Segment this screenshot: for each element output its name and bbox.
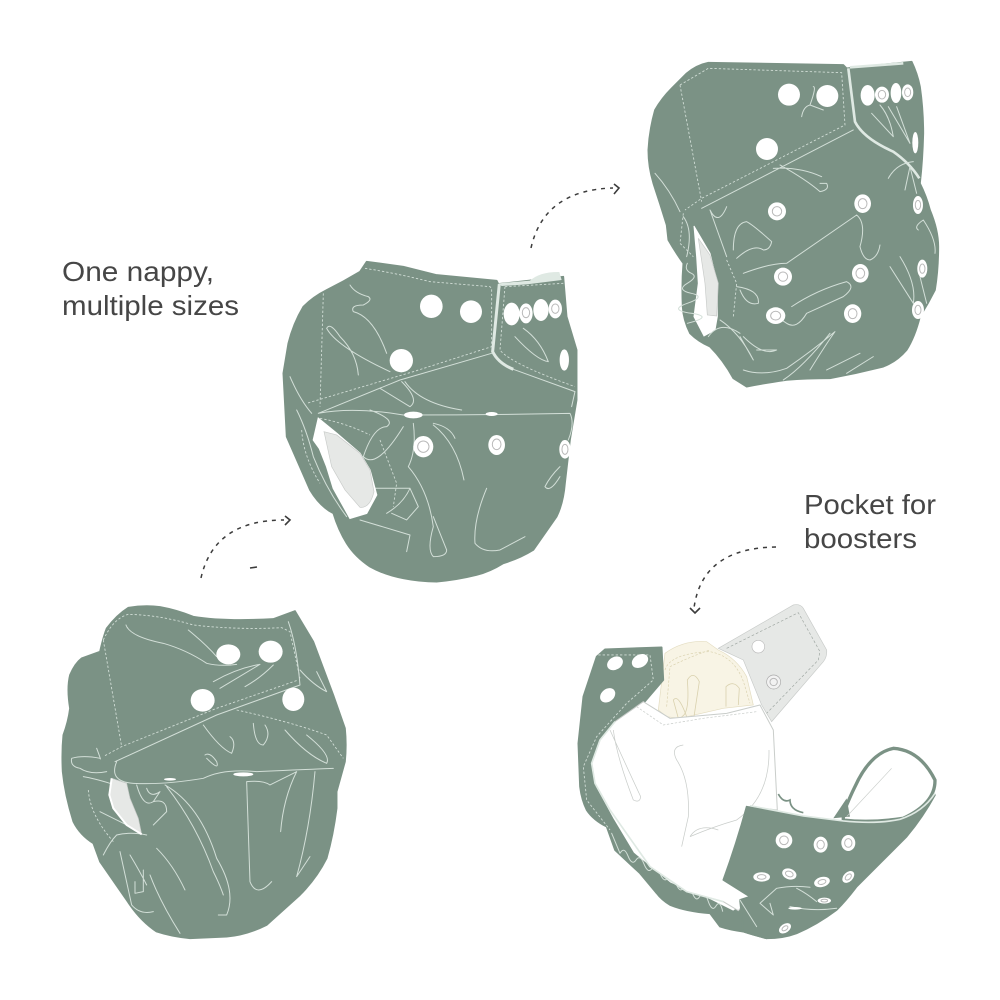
stitching and ruching on green band <box>583 655 757 925</box>
heading: multiple sizes line: multiple sizes <box>62 290 239 321</box>
heading: pocket for boosters: Pocket for <box>804 489 936 520</box>
fold stitching and creases <box>71 614 343 933</box>
arrow: pocket label to pocket <box>690 547 776 613</box>
snap holes <box>164 641 304 781</box>
heading: boosters line: boosters <box>804 523 917 554</box>
gusset lining <box>698 238 718 316</box>
arrow: medium to large nappy <box>531 184 619 248</box>
elastic gusset <box>694 226 717 336</box>
white leg edge <box>109 778 142 834</box>
fold stitching and creases <box>290 268 575 557</box>
nappy body <box>62 606 346 938</box>
pale lining edge <box>592 722 723 902</box>
snap holes <box>390 295 569 418</box>
press studs <box>413 300 571 459</box>
front panel edge highlight <box>750 793 935 822</box>
waist lining highlight <box>848 63 919 178</box>
icon: smallest nappy, bottom left <box>62 606 346 938</box>
green front panel <box>723 795 935 938</box>
lining creases and stitching <box>610 707 769 847</box>
icon: largest nappy, top right <box>648 62 938 387</box>
cream booster inserts <box>658 641 753 718</box>
snap holes <box>756 83 918 160</box>
gusset lining <box>324 432 374 507</box>
waist lining <box>498 272 562 286</box>
snap holes on back band <box>597 651 651 706</box>
front panel creases <box>740 886 837 927</box>
waist loop <box>833 748 935 821</box>
green back waistband and elasticated leg <box>578 647 767 938</box>
elastic ruching <box>679 217 740 337</box>
tab edge highlight <box>493 284 513 369</box>
icon: open nappy with booster pocket, bottom right <box>578 605 935 938</box>
white inner lining <box>592 702 777 911</box>
fold stitching and creases <box>655 68 935 380</box>
wavy inner leg edge <box>778 794 803 813</box>
nappy body <box>283 262 577 582</box>
press studs <box>766 84 927 324</box>
elastic gusset <box>109 778 142 834</box>
press studs <box>753 832 857 936</box>
heading: one nappy, multiple sizes: One nappy, <box>62 256 214 287</box>
elastic gusset <box>313 418 377 518</box>
grey fastening tab <box>718 605 827 722</box>
nappy body <box>648 62 938 387</box>
arrow: smallest to medium nappy <box>201 516 290 578</box>
icon: medium nappy, centre <box>283 262 577 582</box>
